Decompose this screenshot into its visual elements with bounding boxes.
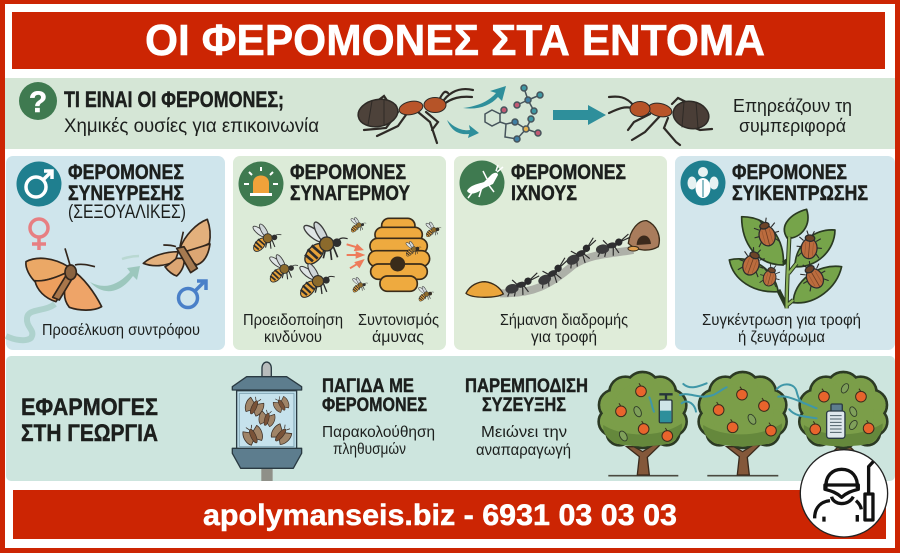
illustration: bees <box>251 217 368 300</box>
text: danger warning: κινδύνου <box>264 329 322 346</box>
logo: sprayer technician badge <box>800 450 888 537</box>
panel: trail pheromones <box>454 156 667 350</box>
arrow: upper teal curve <box>463 86 506 109</box>
text: defense coordination <box>358 312 439 346</box>
text: mating disruption: ΠΑΡΕΜΠΟΔΙΣΗ <box>465 376 588 397</box>
icon: pheromone bottle <box>827 404 845 438</box>
illustration: pheromone wisps <box>649 383 817 418</box>
title banner <box>12 12 885 69</box>
illustration: warning arrows <box>347 244 363 268</box>
text: pheromone trap <box>322 376 435 458</box>
panel: aggregation pheromones <box>675 156 895 350</box>
icon: ant badge <box>460 160 504 206</box>
text: danger warning: Προειδοποίηση <box>243 312 343 329</box>
heading: ΣΥΝΕΥΡΕΣΗΣ <box>68 182 184 205</box>
footer banner: apolymanseis.biz - 6931 03 03 03 <box>203 499 677 532</box>
illustration: right ant <box>609 97 712 145</box>
text: mating disruption <box>465 376 588 459</box>
arrow: big teal <box>553 105 606 125</box>
heading: ΦΕΡΟΜΟΝΕΣ <box>290 161 406 184</box>
text: pheromone trap: Παρακολούθηση <box>322 424 435 441</box>
icon: female symbol <box>30 219 48 250</box>
tree 1 <box>599 372 778 476</box>
illustration: plant with beetles <box>729 209 842 308</box>
heading: ΦΕΡΟΜΟΝΕΣ <box>68 161 184 184</box>
text: pheromone trap: ΦΕΡΟΜΟΝΕΣ <box>322 395 427 416</box>
text: gathering for food: Συγκέντρωση για τροφή <box>702 312 861 329</box>
tree 3 <box>799 372 887 452</box>
text: route marking: για τροφή <box>531 329 597 346</box>
illustration: scent trails <box>6 256 140 340</box>
panel: alarm pheromones <box>233 156 446 350</box>
icon: question mark <box>19 82 57 120</box>
text: route marking <box>500 312 628 346</box>
heading: ΦΕΡΟΜΟΝΕΣ <box>511 161 626 184</box>
illustration: male moth <box>143 219 210 276</box>
illustration: left ant <box>356 89 473 143</box>
text: mating disruption: ΣΥΖΕΥΞΗΣ <box>482 395 566 416</box>
text: pheromone trap: ΠΑΓΙΔΑ ΜΕ <box>322 376 414 397</box>
text: pheromone trap: πληθυσμών <box>333 441 406 458</box>
text: defense coordination: Συντονισμός <box>358 312 439 329</box>
illustration: pheromone trap <box>232 362 302 481</box>
text: mate attraction: Προσέλκυση συντρόφου <box>42 322 200 339</box>
text: danger warning <box>243 312 343 346</box>
heading: ΣΥΙΚΕΝΤΡΩΣΗΣ <box>732 182 868 205</box>
illustration: ant trail <box>466 221 659 298</box>
heading: applications in agriculture: ΣΤΗ ΓΕΩΡΓΙΑ <box>21 420 158 447</box>
heading: ΙΧΝΟΥΣ <box>511 182 577 205</box>
text: route marking: Σήμανση διαδρομής <box>500 312 628 329</box>
text: gathering for food <box>702 312 861 346</box>
panel: what are pheromones <box>5 78 895 149</box>
tree 2 <box>699 372 787 475</box>
heading: ΣΥΝΑΓΕΡΜΟΥ <box>290 182 410 205</box>
text: chemical substances: Χημικές ουσίες για επικοινωνία <box>64 116 319 137</box>
heading <box>290 161 410 205</box>
heading <box>732 161 868 205</box>
icon: spray dispenser <box>659 394 673 423</box>
heading: ΦΕΡΟΜΟΝΕΣ <box>732 161 847 184</box>
footer banner <box>13 490 886 539</box>
heading <box>511 161 626 205</box>
heading: applications in agriculture <box>21 394 158 447</box>
text: mating disruption: Μειώνει την <box>481 424 567 441</box>
illustration: apple trees <box>599 372 887 476</box>
panel: mating pheromones <box>6 156 225 350</box>
title banner: ΟΙ ΦΕΡΟΜΟΝΕΣ ΣΤΑ ΕΝΤΟΜΑ <box>145 16 765 65</box>
heading: (ΣΕΞΟΥΑΛΙΚΕΣ) <box>68 202 186 223</box>
panel: agricultural applications <box>6 356 895 481</box>
heading: applications in agriculture: ΕΦΑΡΜΟΓΕΣ <box>21 394 158 421</box>
text: defense coordination: άμυνας <box>372 329 424 346</box>
icon: male symbol blue <box>178 281 206 308</box>
heading: what are pheromones: ΤΙ ΕΙΝΑΙ ΟΙ ΦΕΡΟΜΟΝΕΣ; <box>64 87 284 112</box>
icon: question mark: ? <box>29 86 47 119</box>
illustration: beehive <box>368 218 441 302</box>
text: mating disruption: αναπαραγωγή <box>476 442 571 459</box>
icon: beetles badge <box>680 160 726 206</box>
icon: male symbol badge <box>16 162 62 206</box>
illustration: molecule <box>485 85 543 142</box>
illustration: female moth <box>26 248 102 310</box>
text: gathering for food: ή ζευγάρωμα <box>738 329 825 346</box>
text: behaviour second line: συμπεριφορά <box>739 116 846 136</box>
text: affects behaviour: Επηρεάζουν τη <box>733 96 852 116</box>
heading <box>68 161 186 223</box>
arrow: lower teal curve <box>447 120 479 138</box>
icon: alarm badge <box>238 162 284 206</box>
